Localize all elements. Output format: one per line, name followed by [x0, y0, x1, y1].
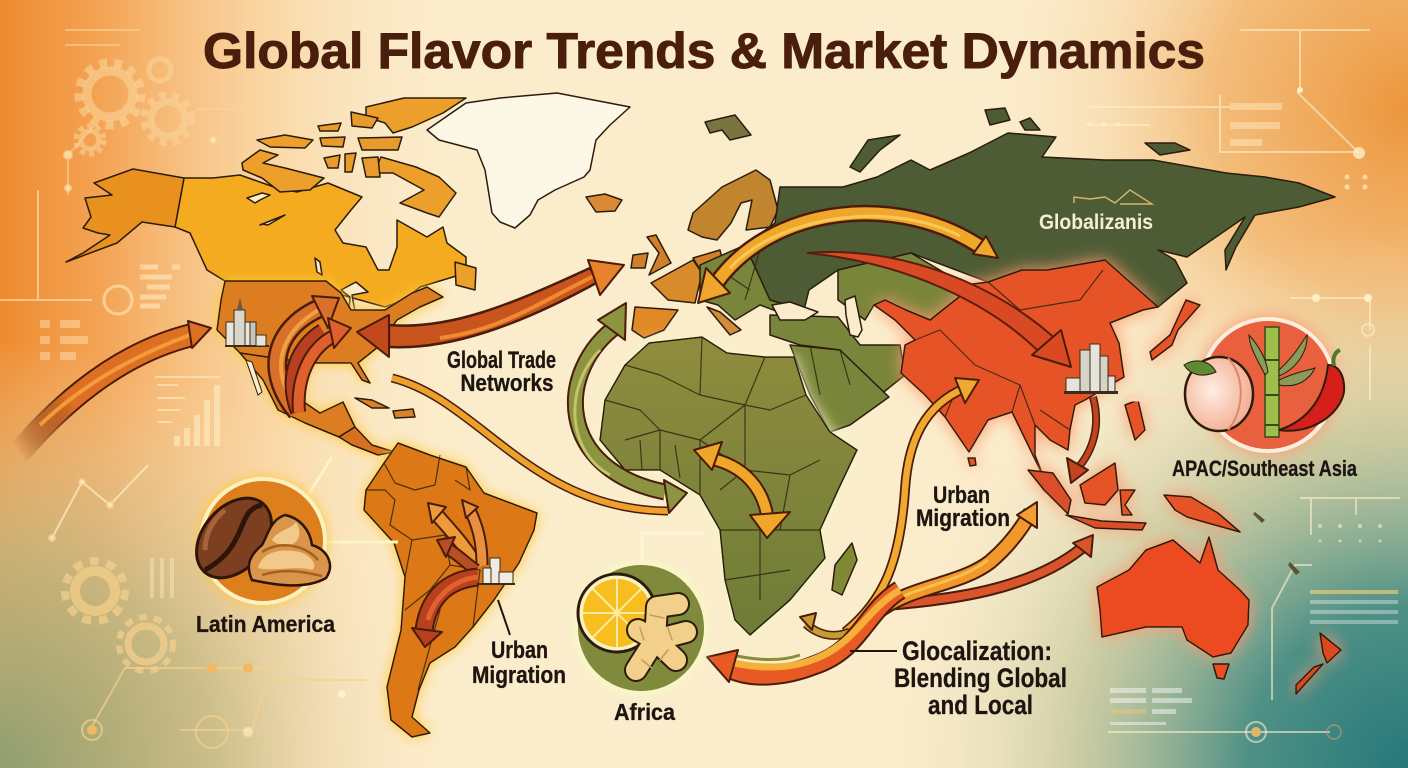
- label: Urban Migration South America: Migration: [472, 662, 566, 689]
- arrow: urban migration to Indonesia gold: [880, 502, 1037, 610]
- icon circle: [201, 479, 325, 603]
- icon: nut butter swirl: [249, 515, 330, 585]
- icon: peach: [1184, 357, 1253, 431]
- icon: coffee bean: [181, 484, 287, 592]
- arrow: Europe to Russia gold double arc: [698, 213, 998, 303]
- connector line: [642, 533, 705, 563]
- Europe: [631, 170, 778, 338]
- decorative tech elements bottom right: [1108, 498, 1400, 742]
- United States and Mexico: [217, 281, 443, 455]
- callout: APAC: [1129, 319, 1344, 451]
- Madagascar: [832, 543, 857, 595]
- Central Asia and Eastern Europe: [700, 245, 965, 432]
- Pacific islands: [1253, 512, 1300, 575]
- arrow: Caribbean to Africa gold: [392, 378, 668, 511]
- label: Urban Migration center: Migration: [916, 505, 1010, 532]
- New Zealand: [1296, 633, 1341, 694]
- Iceland: [586, 194, 622, 212]
- Greenland: [427, 93, 630, 228]
- label: Global Trade Networks: Global Trade: [447, 347, 556, 374]
- label: Urban Migration South America: [472, 600, 566, 689]
- arrow: Russia to China red: [807, 252, 1071, 367]
- label: Globalizanis: Globalizanis: [1039, 211, 1153, 234]
- label: Urban Migration South America: Urban: [491, 637, 548, 664]
- China, India and Southeast Asia: [874, 260, 1158, 480]
- world map: [66, 93, 1341, 737]
- Caribbean islands: [355, 398, 415, 418]
- Russia: [745, 133, 1335, 310]
- label: Glocalization: Glocalization:: [902, 636, 1052, 666]
- South America: [364, 443, 537, 737]
- label: Glocalization: and Local: [928, 690, 1033, 720]
- olive branch arrow: [800, 613, 850, 635]
- label: Africa: Africa: [614, 699, 675, 725]
- city icon: North America: [225, 298, 269, 347]
- arrow: inner Africa double gold: [694, 442, 790, 538]
- arrow: China to Southeast Asia: [1067, 397, 1096, 483]
- arrow: Africa to Europe olive arc: [575, 303, 687, 513]
- connector line: [1129, 398, 1202, 402]
- decorative tech elements top left: [64, 30, 245, 195]
- icon: chili pepper: [1279, 350, 1344, 431]
- arrow: urban migration to India gold: [845, 378, 979, 632]
- decorative mountain sketch on Russia: [1074, 190, 1152, 204]
- decorative tech elements top right: [1085, 30, 1374, 400]
- title: Global Flavor Trends & Market Dynamics: [203, 23, 1205, 79]
- decorative gears and circuits bottom left: [49, 465, 367, 748]
- Australia: [1097, 537, 1249, 657]
- icon: lemon slice: [578, 574, 656, 652]
- Tasmania: [1213, 664, 1229, 679]
- label: Urban Migration center: [916, 482, 1010, 532]
- Africa: [600, 337, 857, 635]
- callout: Africa: [576, 533, 706, 693]
- icon: bamboo: [1249, 327, 1315, 437]
- connector lines: [307, 457, 398, 542]
- label: Latin America: Latin America: [196, 611, 335, 637]
- arrow: Pacific to North America: [0, 321, 211, 476]
- icon: ginger root: [636, 604, 686, 670]
- label: Global Trade Networks: Networks: [460, 370, 554, 397]
- Baja California gulf: [246, 360, 262, 395]
- label: Glocalization: [850, 636, 1067, 720]
- decorative dashboard left: [0, 190, 220, 446]
- Japan, Indonesia, Philippines: [968, 300, 1240, 532]
- Black Sea and Caspian Sea: [772, 296, 862, 337]
- Svalbard and Arctic Russia islands: [705, 108, 1190, 172]
- arrows: North America migration swirl: [277, 296, 351, 412]
- main red and gold band: [707, 590, 900, 682]
- callout: Latin America: [181, 457, 398, 603]
- label: Urban Migration center: Urban: [933, 482, 990, 509]
- label: Global Trade Networks: [447, 347, 556, 397]
- arrow: to Australia region red: [885, 535, 1093, 605]
- arrows: South America migration: [412, 500, 482, 647]
- icon circle: [1202, 319, 1334, 451]
- label: Glocalization: Blending Global: [894, 663, 1067, 693]
- arrow: North America to Europe trade: [357, 260, 624, 357]
- city icon: South America: [477, 558, 515, 585]
- arrow: glocalization toward Africa: [707, 590, 900, 682]
- icon circle: [576, 563, 706, 693]
- North America: Canada and Alaska: [66, 98, 476, 312]
- city icon: East Asia: [1064, 344, 1118, 394]
- label: APAC/Southeast Asia: APAC/Southeast Asia: [1172, 456, 1358, 481]
